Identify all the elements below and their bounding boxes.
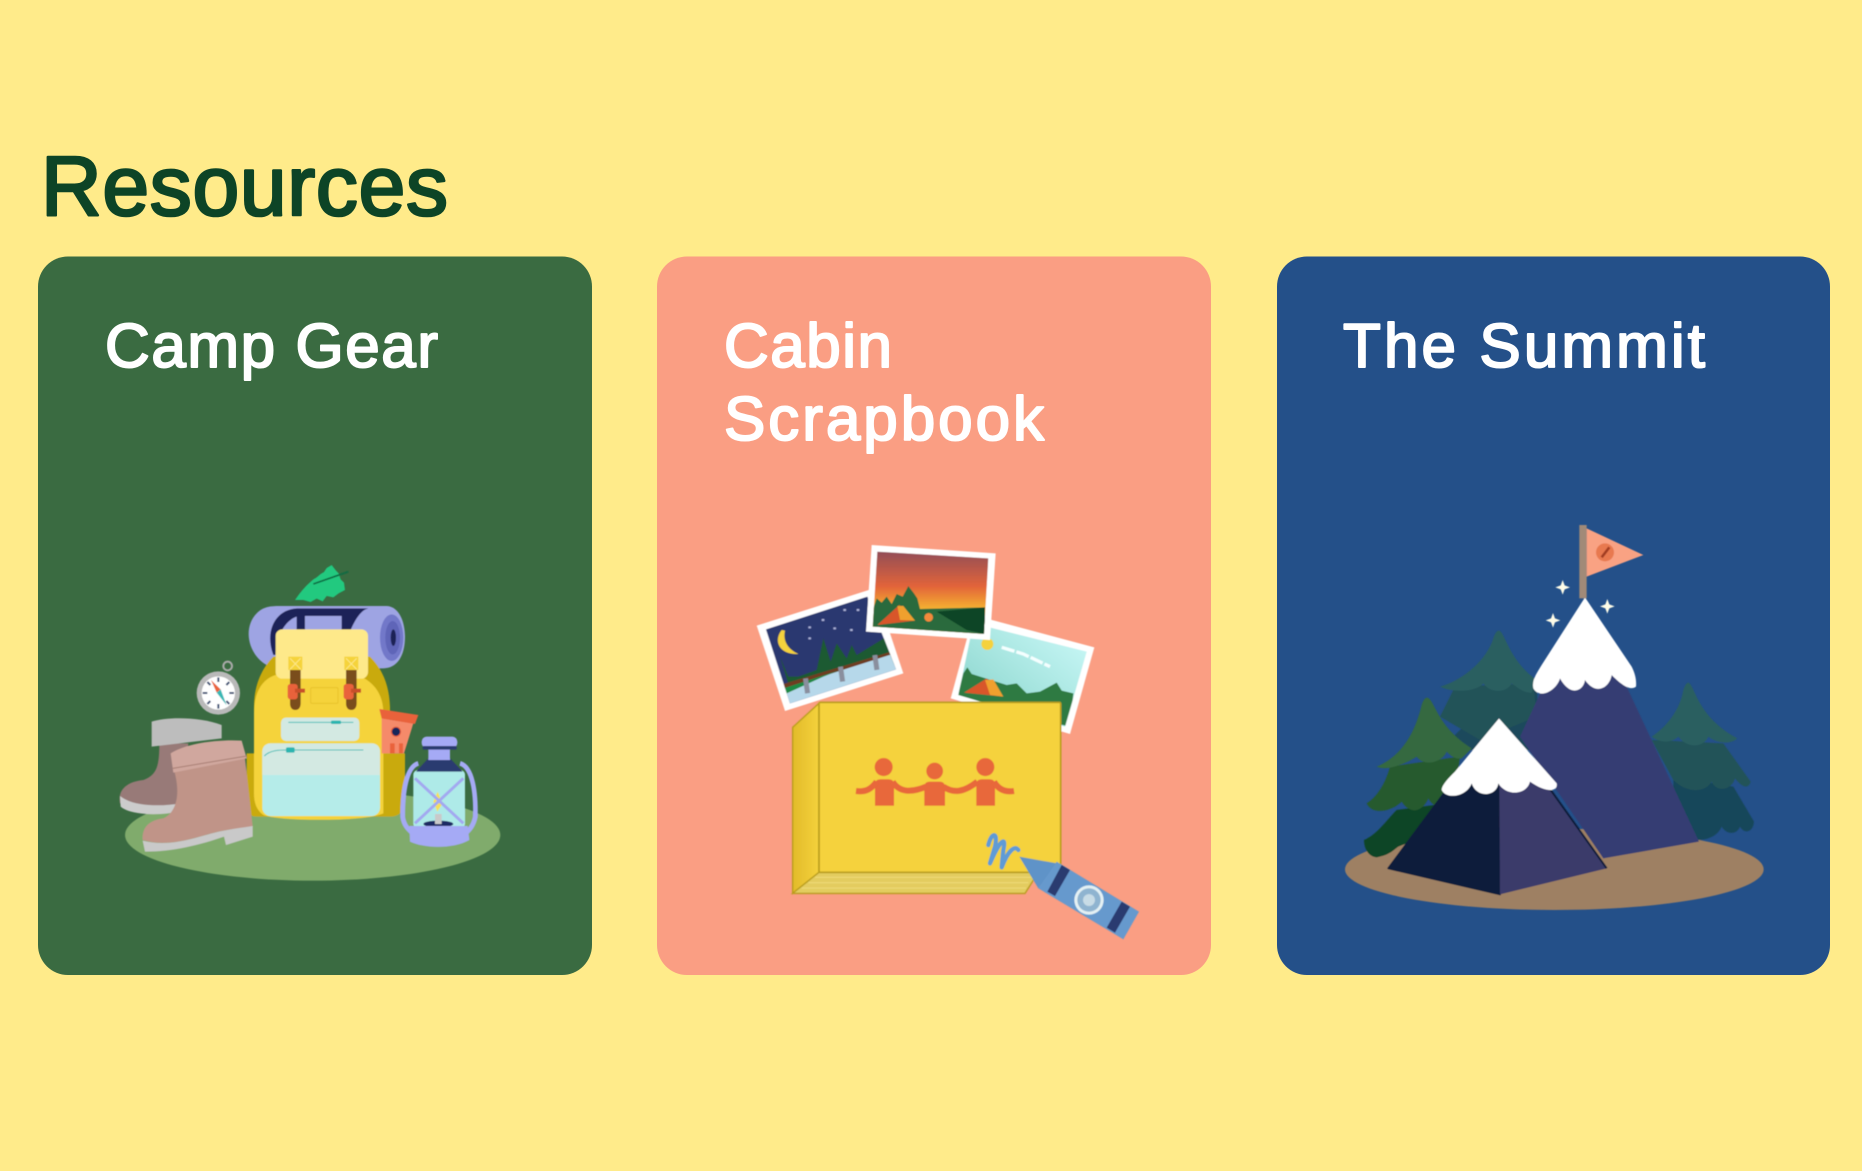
heading: Resources: Resources: [41, 139, 448, 233]
icon: yellow scrapbook: [793, 702, 1061, 893]
icon: small mountain: [1388, 718, 1607, 894]
icon: leaf: [295, 565, 348, 602]
icon: compass: [197, 662, 240, 715]
illustration: snowy mountains with flag: [1345, 525, 1764, 910]
icon: backpack: [247, 629, 405, 820]
icon: flashlight: [379, 709, 418, 753]
card title: Cabin Scrapbook: Scrapbook: [724, 385, 1045, 454]
icon: rear teal pine tree: [1440, 631, 1540, 750]
card title: Cabin Scrapbook: Cabin: [724, 312, 892, 381]
icon: sleeping roll: [249, 606, 405, 668]
card title: The Summit: The Summit: [1343, 312, 1705, 381]
icon: summit flag: [1579, 525, 1643, 598]
icon: lantern: [403, 737, 475, 847]
card title: Cabin Scrapbook: [724, 312, 1045, 454]
photo: day camp: [951, 615, 1094, 734]
icon: right teal pine tree: [1652, 683, 1754, 840]
icon: front boot: [143, 740, 253, 852]
panel: Cabin Scrapbook: [657, 256, 1211, 975]
icon: blue crayon with scribble: [988, 835, 1139, 939]
icon: back boot: [120, 718, 222, 814]
icon: green pine tree: [1364, 698, 1472, 857]
icon: large mountain: [1520, 597, 1699, 858]
panel: The Summit: [1277, 256, 1830, 975]
illustration: backpack, boots, compass and lantern: [120, 565, 500, 881]
icon: three camper figures: [856, 758, 1014, 806]
card title: Camp Gear: Camp Gear: [105, 312, 438, 381]
illustration: scrapbook, photos and crayon: [757, 545, 1139, 939]
photo: sunset camp: [866, 545, 996, 640]
icon: sparkles: [1546, 580, 1615, 628]
photo: night camp: [757, 588, 903, 711]
panel: Camp Gear: [38, 256, 592, 975]
